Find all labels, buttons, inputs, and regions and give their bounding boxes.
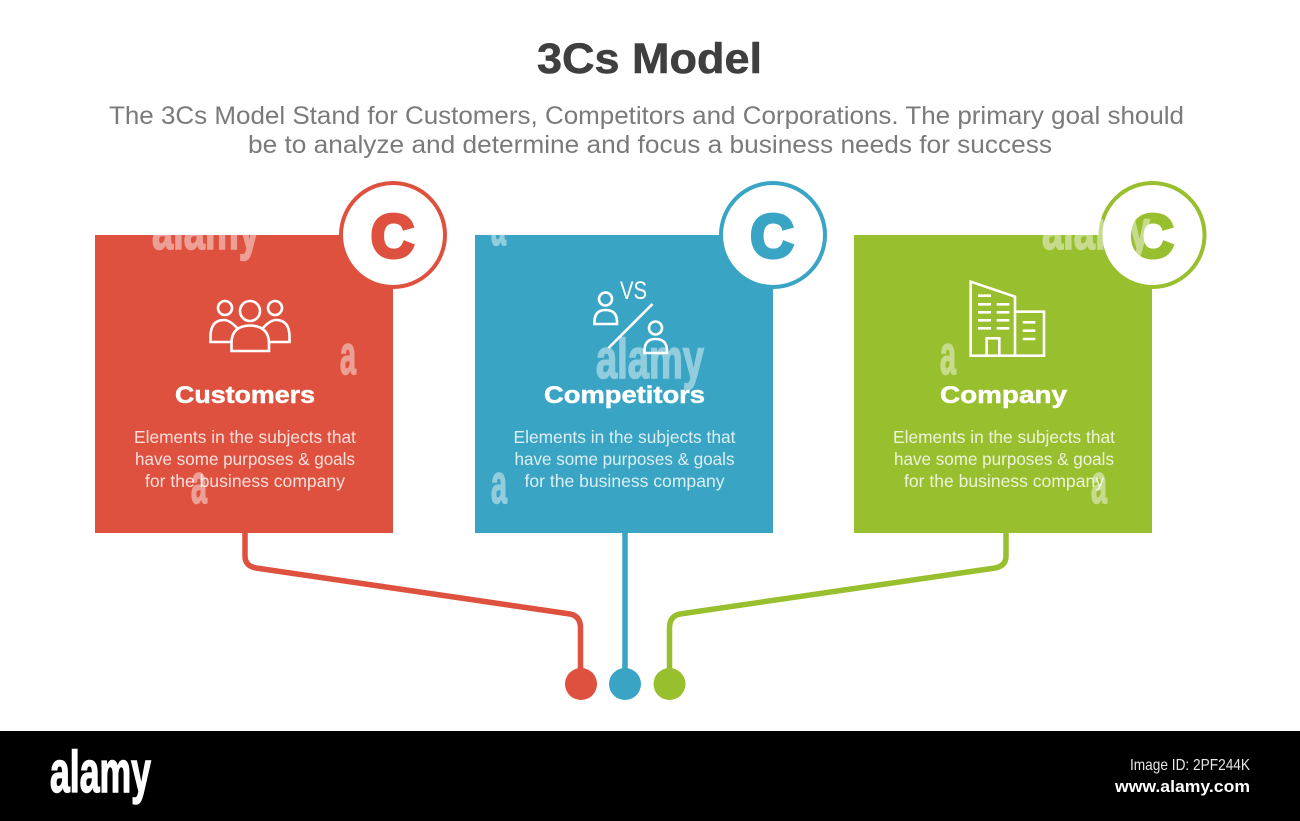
icon: competitors versus: VS [620,277,647,305]
badge: competitors C [721,183,825,287]
heading: company: Company [940,382,1068,409]
text: customers description: have some purposes & goals [135,449,355,469]
icon: competitors versus [594,277,667,353]
subtitle: be to analyze and determine and focus a business needs for success [248,131,1052,159]
panel: company [854,235,1152,533]
text: competitors description: for the business company [524,471,725,491]
footer url: www.alamy.com [1114,777,1250,796]
watermark overlays: a [491,452,507,515]
heading: competitors: Competitors [544,382,705,409]
icon: company building [971,282,1044,356]
heading: customers: Customers [175,382,315,409]
connector: company [670,533,1006,684]
text: company description [893,427,1115,491]
watermark overlays: a [491,194,506,257]
watermark overlays: a [191,452,207,515]
footer logo: alamy [50,740,151,805]
connector: customers [245,533,580,684]
text: customers description: for the business company [145,471,345,491]
badge: competitors C: C [750,203,794,270]
text: customers description [134,427,356,491]
panel: customers [95,235,393,533]
watermark overlays: alamy [152,198,260,261]
panel: competitors [475,235,773,533]
watermark overlays: a [1091,452,1107,515]
subtitle [109,102,1184,159]
text: customers description: Elements in the subjects that [134,427,356,447]
connector: competitors [622,533,628,684]
text: competitors description: have some purposes & goals [514,449,735,469]
icon: customers group [210,301,290,351]
dot: competitors [609,668,641,700]
watermark overlays: alamy [1042,198,1150,261]
footer image id: Image ID: 2PF244K [1130,757,1250,774]
watermark overlays: a [340,323,356,386]
footer bar [0,731,1300,821]
text: company description: Elements in the subjects that [893,427,1115,447]
badge: customers C [341,183,445,287]
badge: company C: C [1130,203,1174,270]
text: competitors description: Elements in the subjects that [514,427,736,447]
watermark overlays [152,194,1150,515]
watermark overlays: alamy [596,327,704,390]
title: 3Cs Model [537,35,762,83]
text: competitors description [514,427,736,491]
text: company description: for the business company [904,471,1104,491]
text: company description: have some purposes & goals [894,449,1114,469]
badge: company C [1100,183,1204,287]
subtitle: The 3Cs Model Stand for Customers, Competitors and Corporations. The primary goal should [109,102,1184,130]
dot: customers [565,668,597,700]
badge: customers C: C [371,203,414,270]
watermark overlays: a [940,323,956,386]
dot: company [654,668,686,700]
